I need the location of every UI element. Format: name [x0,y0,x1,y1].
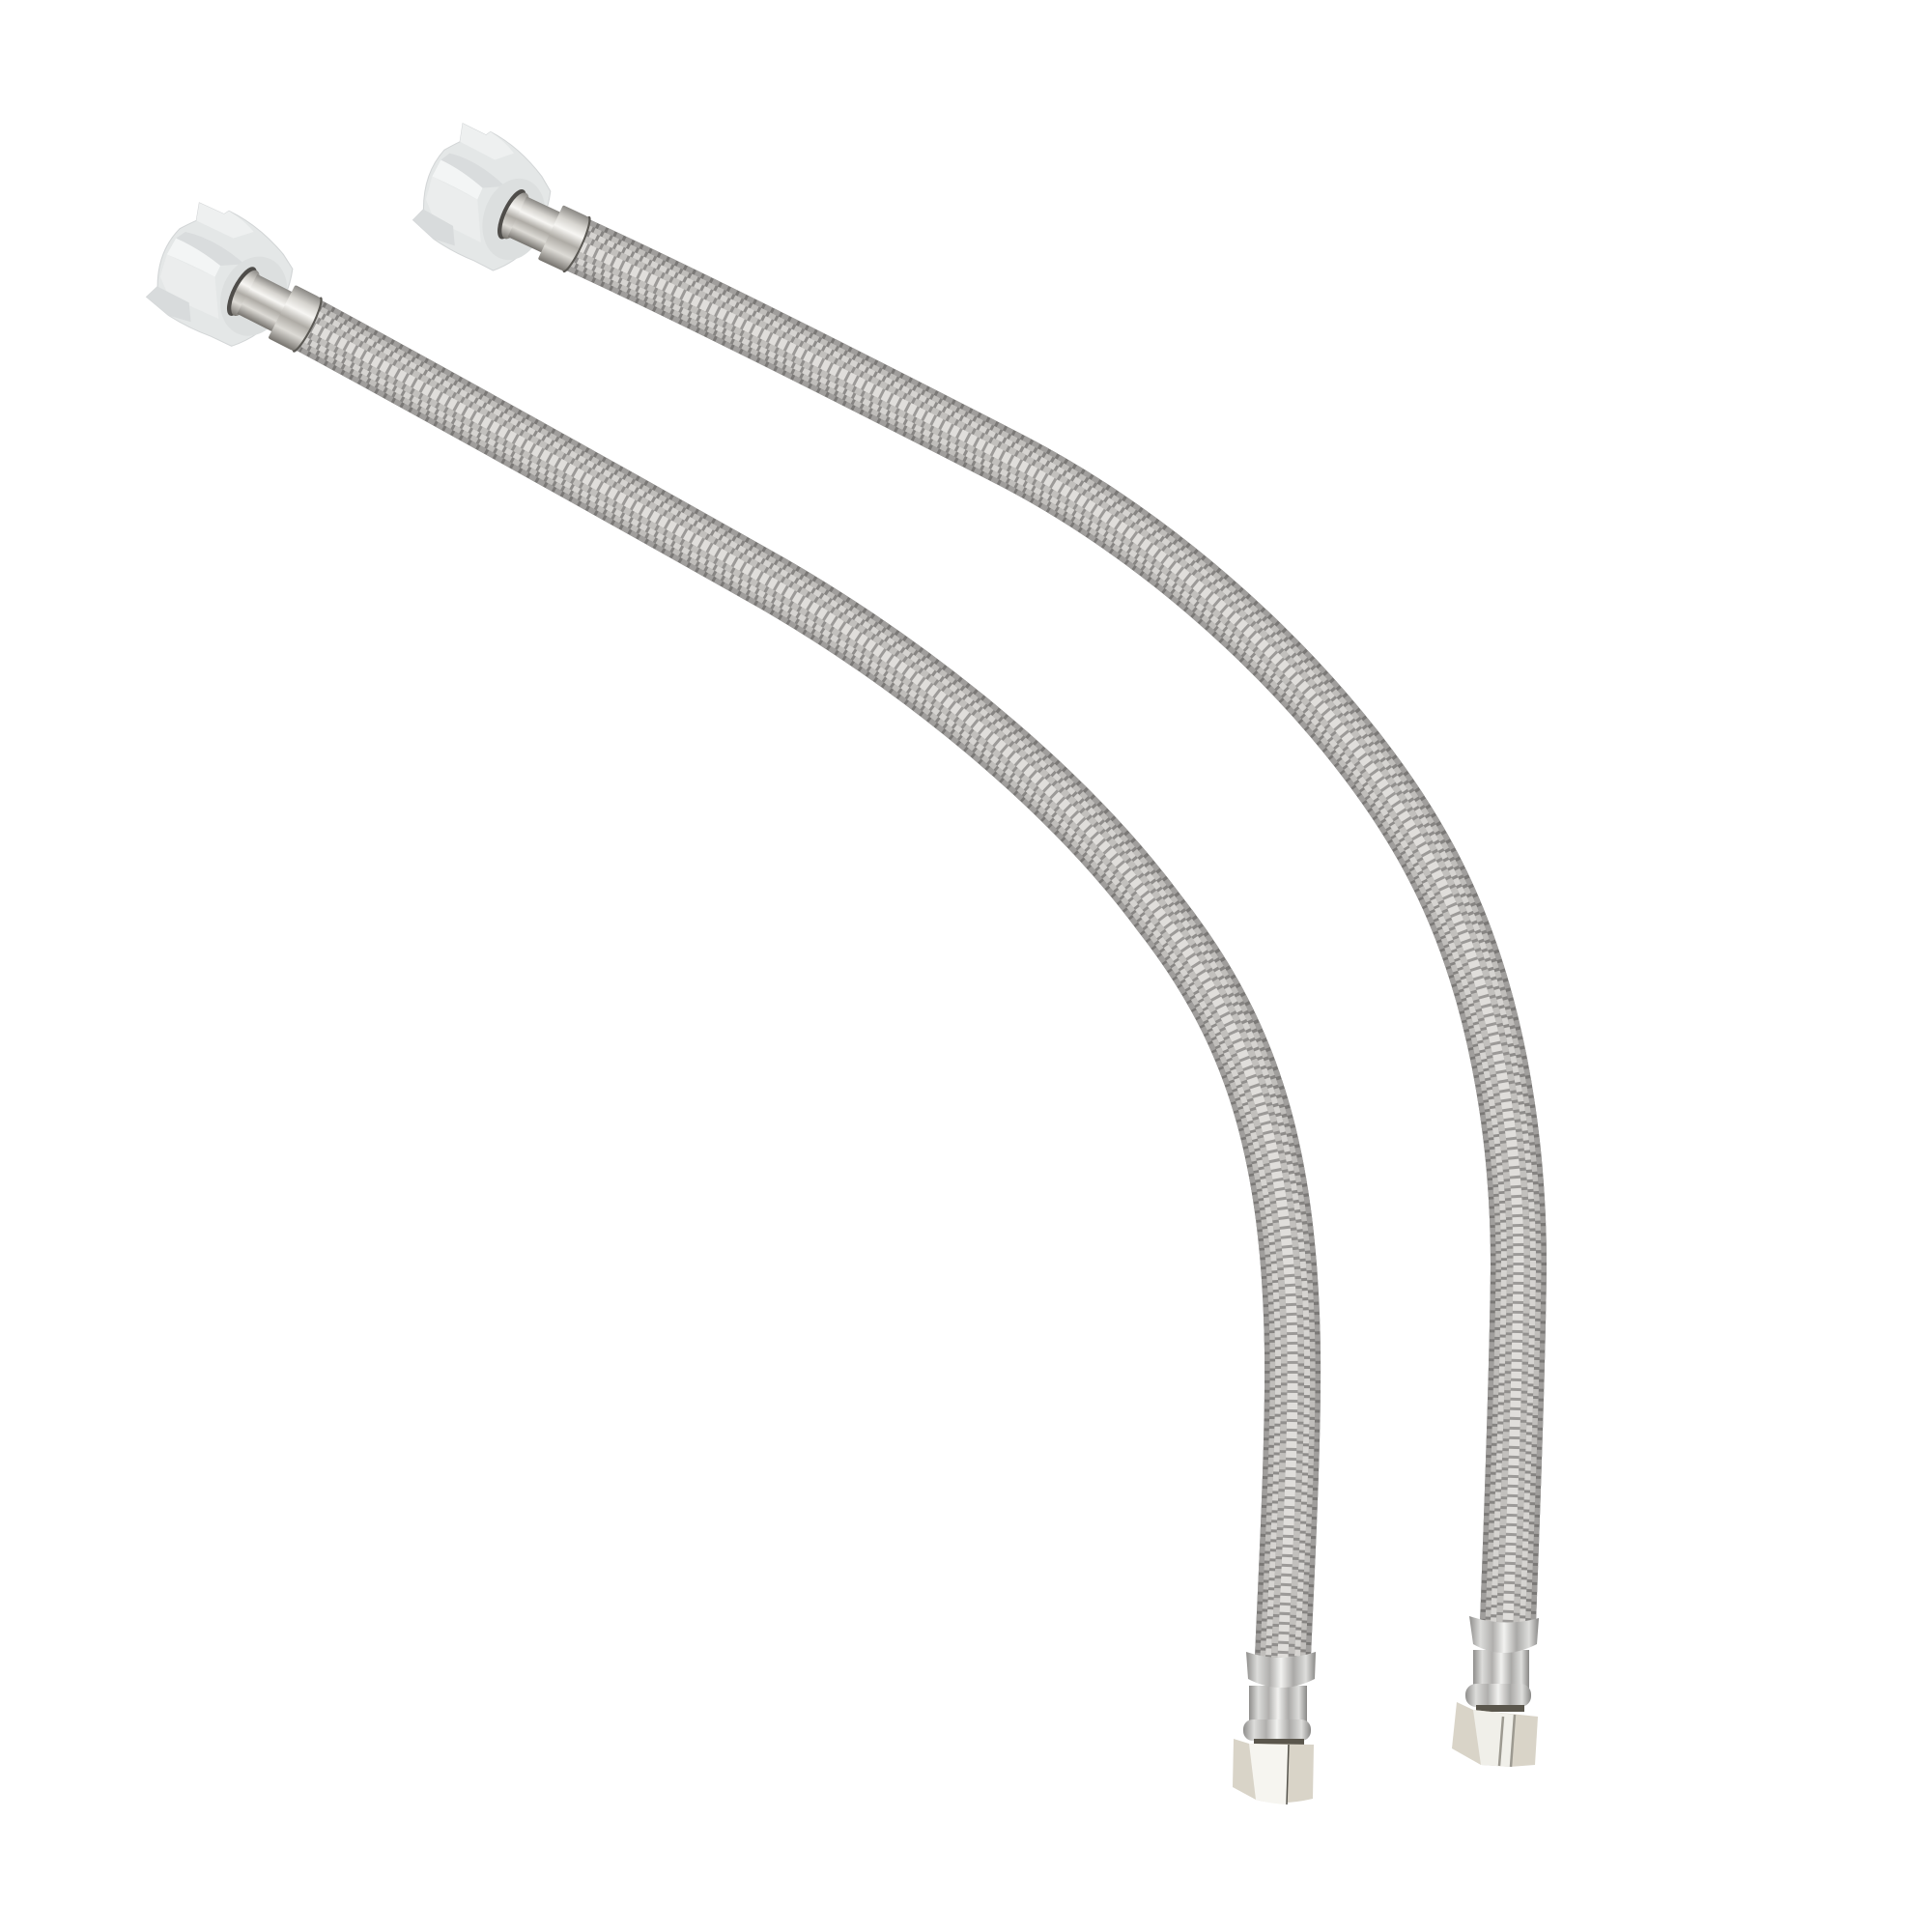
left braided hose [305,324,1293,1658]
right brass hex nut [1452,1702,1538,1767]
right hose assembly [413,124,1539,1767]
left brass hex nut [1233,1739,1314,1804]
icon: right white plastic nut [413,124,554,270]
icon: left white plastic nut [147,203,297,346]
right hose upper metal fitting [490,182,595,275]
left hose upper metal fitting [219,260,327,355]
left hose assembly [147,203,1316,1804]
right braided hose [571,242,1519,1623]
left hose lower metal fitting [1243,1652,1316,1746]
right hose lower metal fitting [1465,1616,1539,1712]
